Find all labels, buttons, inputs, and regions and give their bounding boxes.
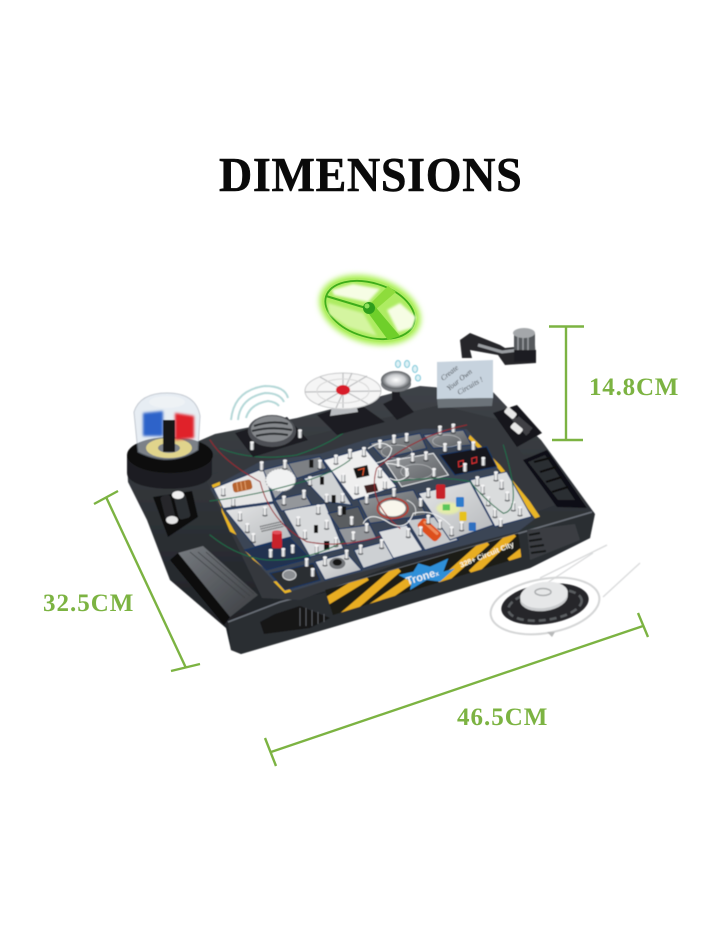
logo text: Tronex	[405, 566, 441, 588]
title: DIMENSIONS	[219, 149, 522, 202]
metal button module	[381, 371, 414, 420]
dimension: height 14.8CM	[549, 326, 679, 440]
right grip	[523, 450, 587, 508]
create your own circuits card: Create	[439, 363, 461, 383]
right front block	[527, 524, 580, 560]
create your own circuits card: Circuits !	[456, 375, 485, 397]
create your own circuits card: Your Own	[445, 367, 474, 393]
red digits	[458, 457, 477, 467]
connecting wires	[210, 425, 513, 560]
LED cluster	[436, 484, 476, 531]
front stripe band	[323, 533, 527, 620]
spinning top	[486, 545, 640, 642]
joystick knob	[329, 558, 345, 569]
band caption: 328+ Circuit City	[458, 539, 516, 570]
concentric circuit marks	[381, 435, 461, 479]
board body	[127, 386, 595, 654]
red push button	[272, 530, 282, 548]
circuit panel modules	[210, 424, 540, 593]
flying disc	[311, 263, 429, 357]
create your own circuits card	[437, 360, 493, 408]
microphone part	[283, 570, 296, 580]
lamp module	[127, 393, 213, 489]
panel base	[210, 429, 540, 593]
disc panes	[328, 284, 416, 336]
dimension: height 14.8CM: 14.8CM	[589, 374, 679, 401]
seven segment display	[353, 465, 378, 493]
orange light tube	[416, 517, 443, 543]
water droplets	[396, 360, 420, 381]
infographic canvas	[44, 158, 678, 766]
black resistor parts	[309, 460, 346, 550]
white round dial	[266, 469, 296, 491]
yellow trim	[212, 435, 540, 593]
circuit board toy	[127, 328, 640, 654]
left front corner block	[260, 606, 330, 634]
left grip	[170, 546, 258, 625]
dimension: depth 32.5CM: 32.5CM	[43, 590, 134, 617]
buzzer module	[235, 415, 308, 457]
grille	[260, 522, 283, 531]
band logo burst	[398, 558, 455, 590]
dimension: depth 32.5CM	[43, 491, 200, 671]
dimension: width 46.5CM	[265, 613, 648, 766]
fan module	[305, 373, 385, 435]
crank arm	[460, 328, 536, 365]
coil component	[232, 479, 253, 493]
speaker disc	[377, 498, 408, 518]
module tiles	[213, 430, 532, 590]
sound waves	[231, 386, 288, 420]
right battery holder	[493, 405, 542, 447]
connector pins	[221, 424, 523, 578]
dimension: width 46.5CM: 46.5CM	[457, 704, 548, 731]
left battery holder	[153, 491, 198, 537]
